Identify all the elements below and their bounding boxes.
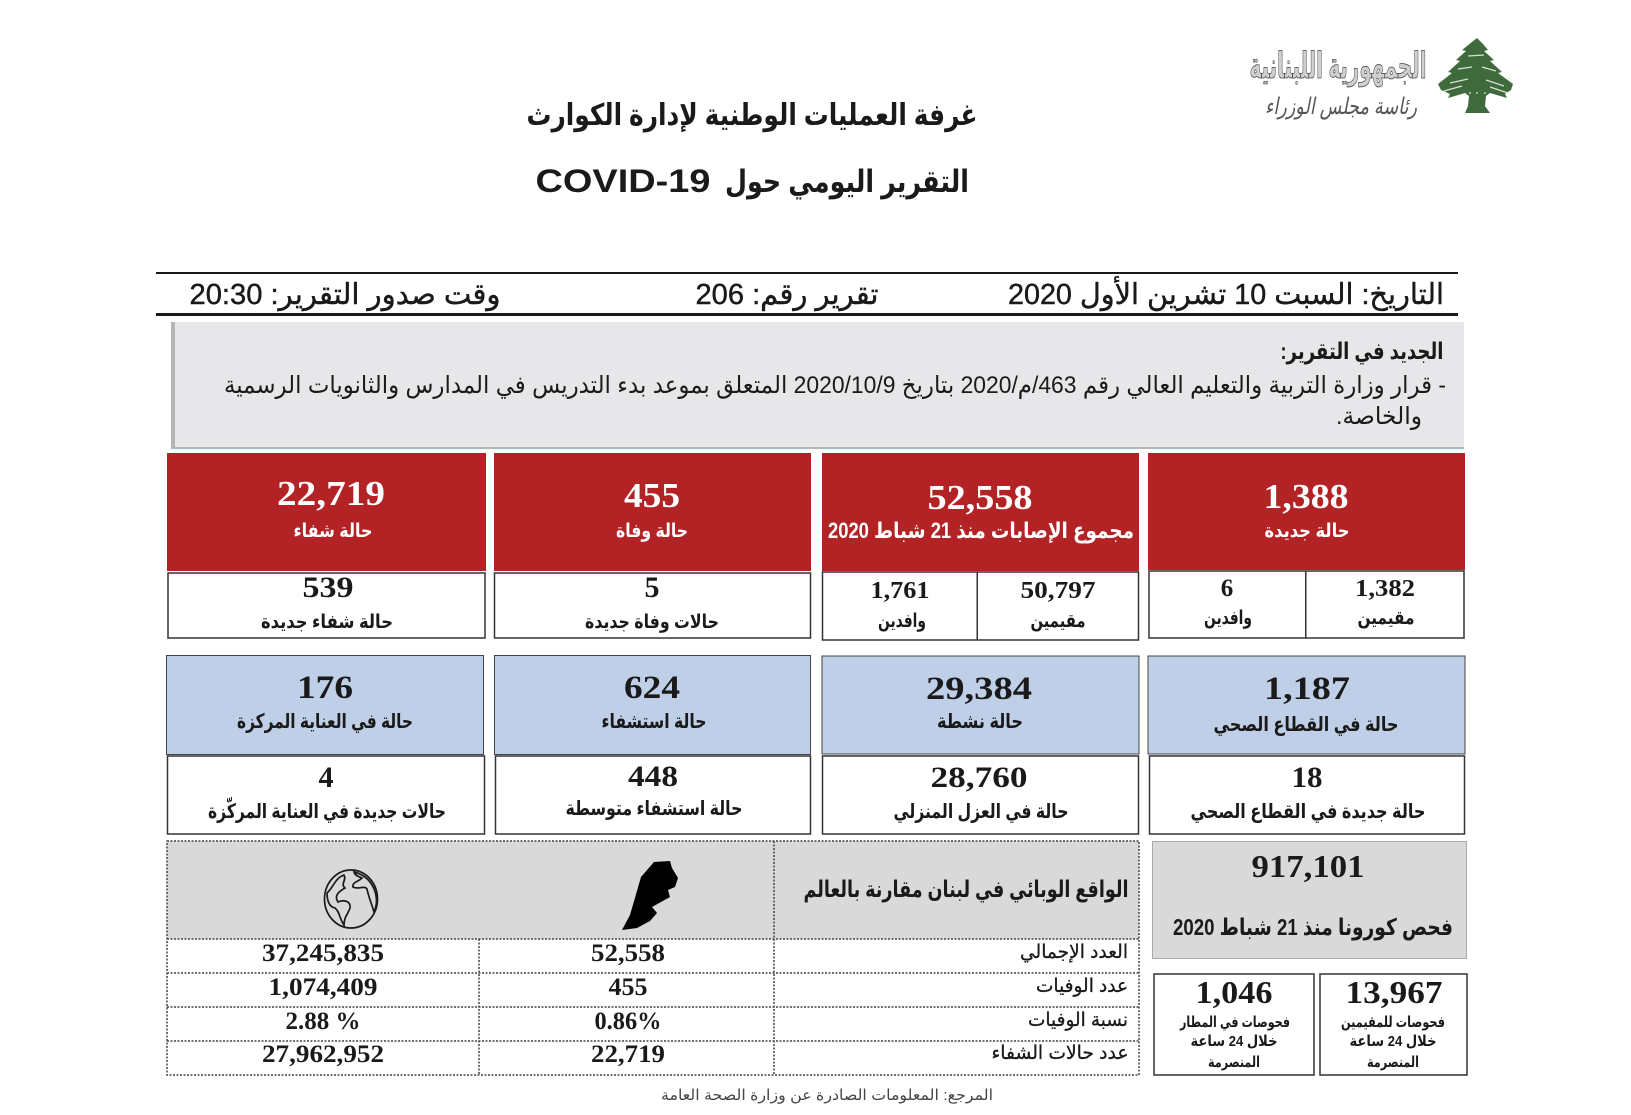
ICU figure: 176	[297, 670, 353, 706]
card: recoveries	[167, 453, 486, 638]
title line 2: التقرير اليومي حول	[725, 164, 969, 200]
residents label: مقيمين	[1358, 608, 1414, 629]
date: التاريخ: السبت 10 تشرين الأول 2020	[1008, 275, 1444, 311]
new health sector figure: 18	[1292, 761, 1322, 794]
arrivals label: وافدين	[1204, 608, 1252, 629]
row: death rate: 2.88 %	[286, 1008, 360, 1035]
row: deaths: 455	[608, 974, 648, 1001]
airport tests figure: 1,046	[1196, 974, 1272, 1010]
total cases figure: 52,558	[928, 478, 1032, 517]
card: total cases	[822, 453, 1139, 640]
total cases label: مجموع الإصابات منذ 21 شباط 2020	[828, 518, 1134, 544]
news body line 1: - قرار وزارة التربية والتعليم العالي رقم 463/م/2020 بتاريخ 2020/10/9 المتعلق بموعد بدء التدريس في المدارس والثانويات الرسمية	[224, 372, 1446, 399]
row: death rate	[286, 1008, 1128, 1035]
news heading: الجديد في التقرير:	[1280, 338, 1444, 365]
logo calligraphy text: الجمهورية اللبنانية	[1250, 45, 1426, 87]
moderate label: حالة استشفاء متوسطة	[566, 798, 742, 820]
recoveries total: 22,719	[277, 474, 385, 513]
panel: resident tests	[1320, 974, 1467, 1075]
tests figure: 917,101	[1252, 848, 1364, 884]
row: recoveries: 22,719	[591, 1041, 665, 1068]
title line 2: COVID-19	[536, 163, 710, 199]
new cases figure: 1,388	[1264, 477, 1348, 516]
icon: Lebanon map	[622, 861, 678, 930]
row: recoveries	[262, 1041, 1128, 1068]
deaths total: 455	[624, 476, 680, 515]
card: ICU	[166, 656, 484, 834]
row: deaths: 1,074,409	[268, 974, 378, 1001]
panel: total PCR tests	[1152, 842, 1466, 958]
logo: Lebanese presidency of council of ministers	[1250, 38, 1513, 120]
report time: وقت صدور التقرير: 20:30	[190, 279, 500, 311]
deaths label: حالة وفاة	[616, 521, 688, 542]
title line 2	[536, 163, 969, 200]
residents figure: 50,797	[1020, 578, 1096, 604]
row: deaths: عدد الوفيات	[1036, 976, 1128, 997]
airport tests label: فحوصات في المطار	[1179, 1014, 1290, 1031]
row: deaths	[268, 974, 1128, 1001]
arrivals figure: 1,761	[870, 578, 930, 604]
resident tests label: المنصرمة	[1367, 1054, 1419, 1071]
report number: تقرير رقم: 206	[696, 279, 878, 312]
arrivals figure: 6	[1221, 575, 1233, 602]
card: hospitalised	[494, 656, 810, 834]
panel: Lebanon vs world table	[167, 841, 1139, 1075]
hospitalised label: حالة استشفاء	[602, 711, 706, 733]
home isolation label: حالة في العزل المنزلي	[894, 801, 1068, 824]
ICU label: حالة في العناية المركزة	[237, 711, 413, 734]
icon: cedar tree	[1438, 38, 1513, 113]
resident tests label: فحوصات للمقيمين	[1341, 1014, 1445, 1031]
row: total cases: 52,558	[591, 940, 665, 967]
resident tests label: خلال 24 ساعة	[1350, 1033, 1436, 1050]
residents figure: 1,382	[1355, 576, 1415, 602]
icon: globe	[324, 870, 378, 928]
active figure: 29,384	[926, 671, 1032, 707]
new deaths: 5	[644, 571, 660, 604]
card: new cases	[1148, 453, 1465, 638]
new ICU label: حالات جديدة في العناية المركّزة	[208, 797, 446, 824]
title	[526, 99, 978, 200]
logo calligraphy text: رئاسة مجلس الوزراء	[1265, 93, 1417, 120]
card: health sector	[1148, 656, 1465, 834]
source note: المرجع: المعلومات الصادرة عن وزارة الصحة العامة	[661, 1087, 993, 1104]
card: active cases	[822, 656, 1139, 834]
logo calligraphy text	[1250, 45, 1426, 120]
home isolation figure: 28,760	[930, 761, 1028, 794]
hospitalised figure: 624	[624, 670, 680, 706]
row: death rate: نسبة الوفيات	[1028, 1010, 1128, 1031]
new recoveries: 539	[302, 571, 354, 604]
new ICU figure: 4	[318, 761, 334, 794]
new deaths label: حالات وفاة جديدة	[585, 612, 719, 633]
panel: airport tests	[1154, 974, 1314, 1075]
resident tests label	[1341, 1014, 1445, 1071]
resident tests figure: 13,967	[1346, 974, 1442, 1010]
card: deaths	[494, 453, 811, 638]
moderate figure: 448	[628, 760, 678, 793]
panel: news in the report	[171, 322, 1464, 449]
row: total cases: العدد الإجمالي	[1020, 942, 1128, 963]
report info bar	[156, 272, 1458, 316]
news body line 2: والخاصة.	[1336, 403, 1422, 430]
active label: حالة نشطة	[937, 711, 1023, 733]
airport tests label: خلال 24 ساعة	[1190, 1033, 1278, 1050]
airport tests label	[1179, 1014, 1290, 1071]
arrivals label: وافدين	[878, 611, 926, 632]
row: total cases	[262, 940, 1128, 967]
recoveries label: حالة شفاء	[294, 521, 372, 542]
tests label: فحص كورونا منذ 21 شباط 2020	[1173, 914, 1453, 941]
row: recoveries: 27,962,952	[262, 1041, 384, 1068]
new health sector label: حالة جديدة في القطاع الصحي	[1190, 801, 1426, 824]
health sector label: حالة في القطاع الصحي	[1214, 714, 1398, 737]
airport tests label: المنصرمة	[1208, 1054, 1260, 1071]
residents label: مقيمين	[1030, 611, 1086, 632]
row: total cases: 37,245,835	[262, 940, 384, 967]
row: death rate: 0.86%	[594, 1008, 662, 1035]
title line 1: غرفة العمليات الوطنية لإدارة الكوارث	[526, 99, 978, 132]
health sector figure: 1,187	[1264, 671, 1350, 707]
row: recoveries: عدد حالات الشفاء	[992, 1043, 1128, 1064]
new recoveries label: حالة شفاء جديدة	[261, 612, 393, 633]
new cases label: حالة جديدة	[1264, 521, 1350, 542]
table heading: الواقع الوبائي في لبنان مقارنة بالعالم	[804, 876, 1128, 903]
